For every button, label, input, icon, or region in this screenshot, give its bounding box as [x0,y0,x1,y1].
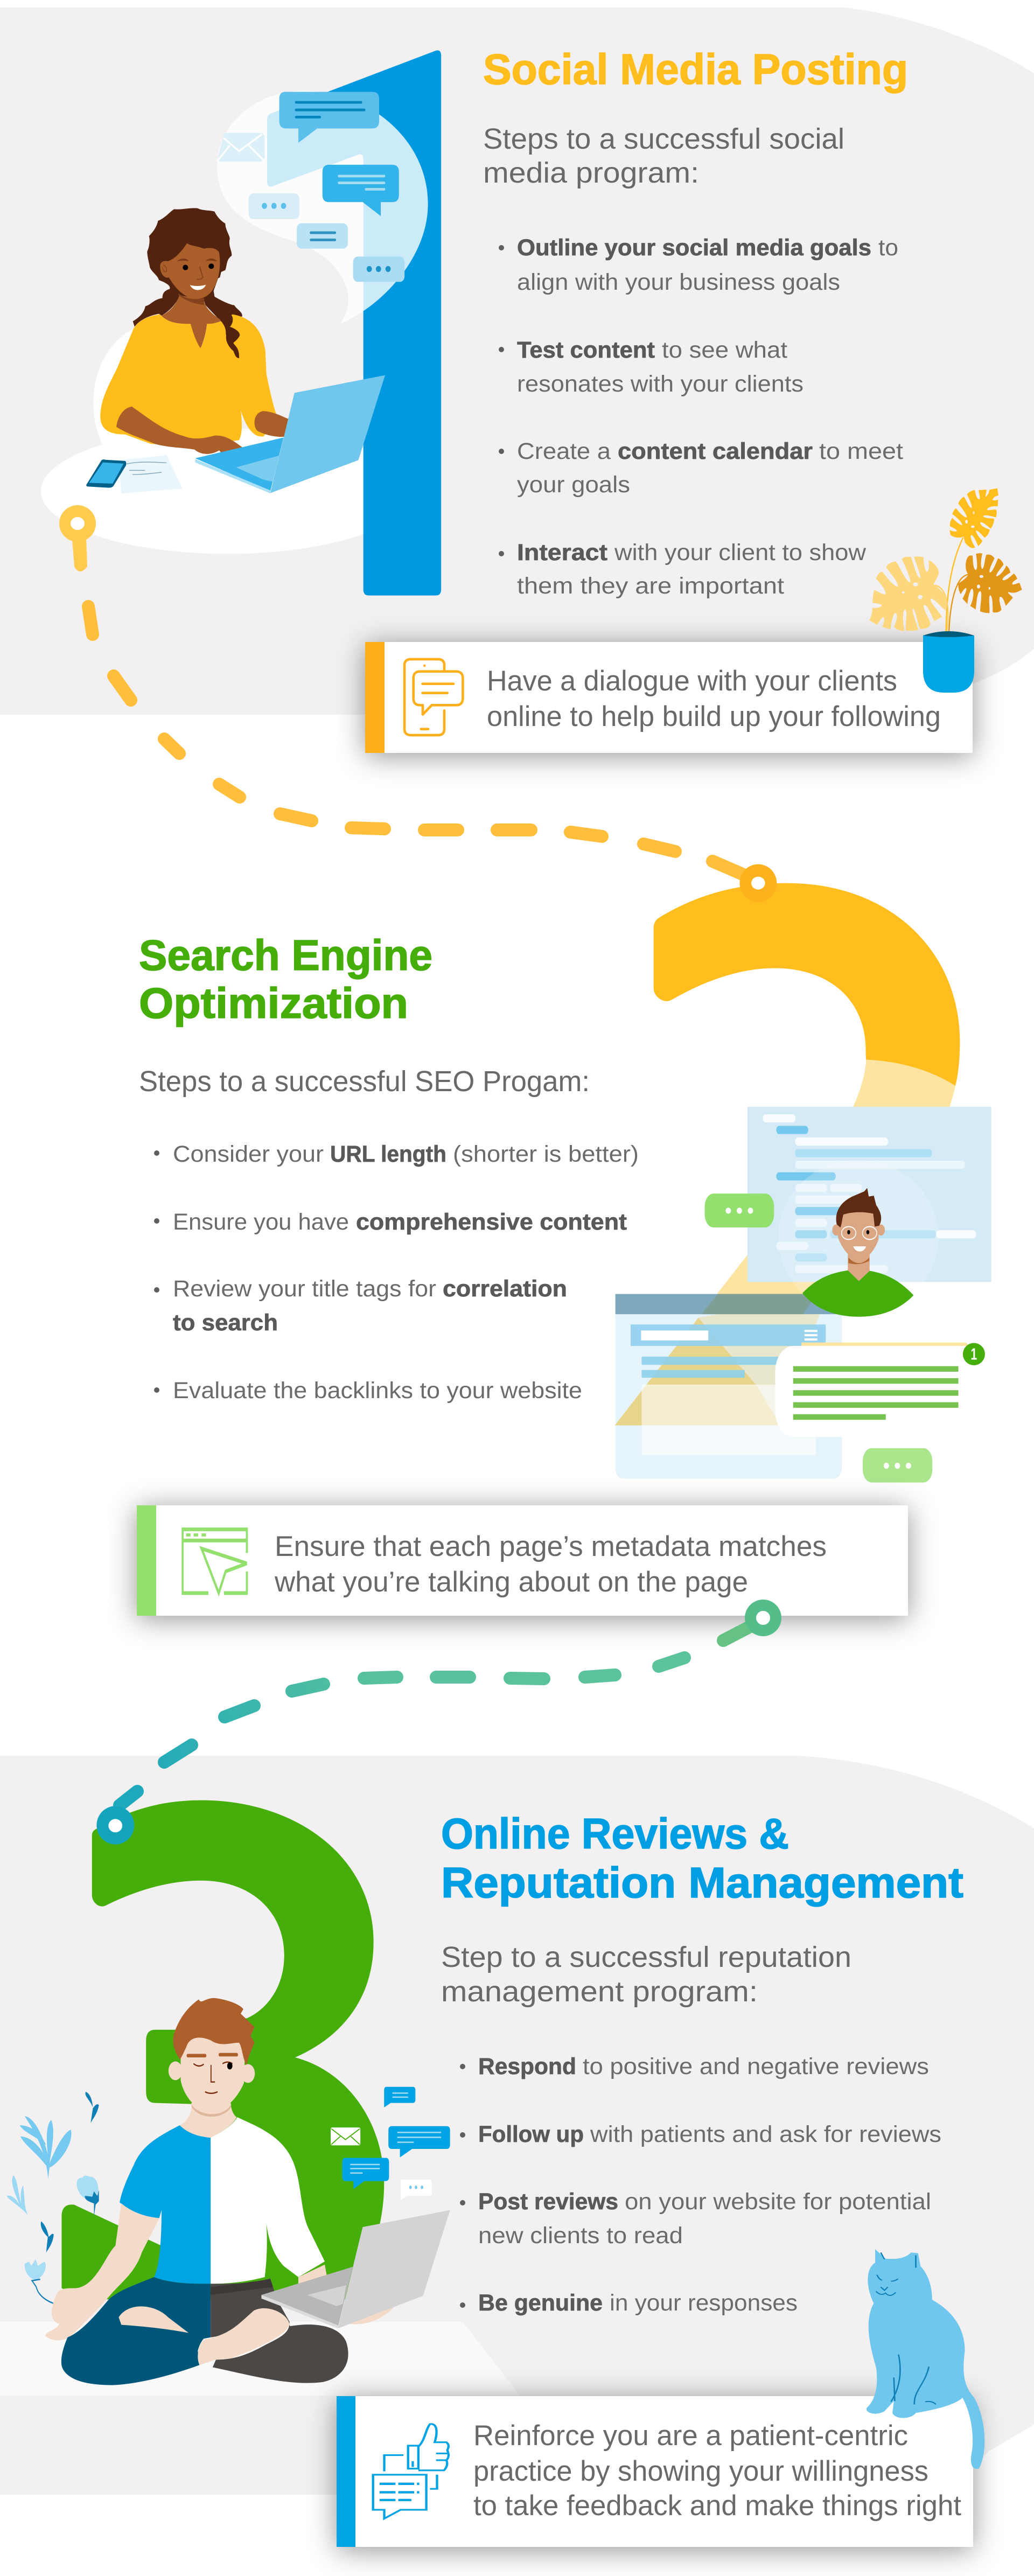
pin: step 2 [723,1600,781,1640]
bullet list: social: Create a [517,438,611,464]
pin overlap [739,864,777,902]
heading: search engine optimization: Search Engine [139,931,432,979]
icon: envelope [218,133,265,162]
table and backdrop [41,328,414,554]
typing bubble right [353,256,404,282]
pin start: step 1 [59,505,96,571]
bullet list: seo: comprehensive content [356,1209,627,1235]
icon: thumbs up and comment [373,2424,449,2518]
bullet list: social: to [878,235,898,261]
heading: social media posting: Social Media Posting [483,45,908,93]
chat bubble middle [323,165,399,216]
bullet list: social: to meet [819,438,903,464]
bullet list: reviews: new clients to read [478,2223,683,2249]
callout: reviews [337,2396,973,2547]
bullet list: social: Outline your social media goals [517,235,871,261]
bullet list: social: align with your business goals [517,269,840,295]
man meditating [45,1998,403,2385]
chat: green left [705,1193,774,1227]
floor [0,2322,520,2396]
bullet list: social: them they are important [517,573,784,599]
panel: online reviews and reputation management [0,1600,1034,2547]
message bubble [297,224,348,249]
bullet list: reviews [460,2054,941,2316]
woman braid over shirt [214,309,240,358]
bullet list: social: your goals [517,472,630,498]
heading: search engine optimization [139,931,432,1027]
woman body [100,315,290,461]
bullet list: reviews: in your responses [610,2290,798,2316]
heading: online reviews: Reputation Management [441,1859,963,1907]
bullet list: seo: URL length [330,1141,446,1167]
pin: step 3 [96,1806,134,1845]
callout: reviews: practice by showing your willingness [473,2455,928,2487]
notification card [775,1343,985,1437]
bullet list: reviews: Be genuine [478,2290,603,2316]
number 3 [61,1800,384,2299]
panel background: reviews [0,1756,1034,2495]
pin end: step 2 [740,864,777,902]
callout: social: online to help build up your following [487,701,941,732]
bullet list: reviews: with patients and ask for reviews [590,2121,941,2147]
typing bubble [249,193,299,219]
developer with glasses [802,1188,913,1317]
thought bubble [217,90,428,324]
callout: social: Have a dialogue with your clients [487,665,897,697]
bullet list: seo: Evaluate the backlinks to your website [173,1378,582,1404]
chat bubble top [280,92,379,143]
callout: seo: Ensure that each page’s metadata matches [275,1531,827,1562]
panel background: social [0,8,1034,715]
callout: social [365,642,973,753]
bullet list: social: Test content [517,337,655,363]
intro text: social [483,123,844,189]
intro text: reviews: management program: [441,1975,758,2008]
bullet list: seo [154,1141,639,1404]
bullet list: reviews: Post reviews [478,2189,618,2215]
woman head and hair [133,208,242,348]
illustration: woman at laptop with big number 1 [41,50,441,596]
icon: phone with chat [404,659,463,735]
phone and paper [86,455,183,493]
small blue plants [6,2092,99,2305]
illustration: number 3 with meditating man [6,1800,450,2385]
illustration: number 2 with developer and screens [615,864,991,1483]
callout: seo: what you’re talking about on the page [274,1566,748,1598]
dashed path: teal from step 2 to step 3 [120,1600,781,1805]
panel: social media posting [0,8,1034,753]
number 1 [267,50,441,596]
cat [867,2249,984,2469]
intro text: social: Steps to a successful social [483,123,844,155]
intro text: reviews: Step to a successful reputation [441,1941,851,1973]
intro text: social: media program: [483,157,699,189]
intro text: reviews [441,1941,851,2008]
bullet list: reviews: Follow up [478,2121,584,2147]
bullet list: seo: to search [173,1310,278,1336]
heading: online reviews [441,1810,963,1907]
bullet list: social: with your client to show [614,540,867,566]
bullet list: social: content calendar [618,438,813,464]
plant [869,488,1022,693]
bullet list: seo: Review your title tags for [173,1276,436,1302]
icon: floating messages [331,2087,450,2200]
pot [923,631,974,693]
bullet list: reviews: on your website for potential [625,2189,931,2215]
callout: reviews: Reinforce you are a patient-centric [473,2420,908,2452]
icon: browser cursor [183,1530,247,1593]
code panel [747,1107,991,1315]
number 2 [615,883,960,1426]
bullet list: seo: correlation [443,1276,567,1302]
bullet list: social: Interact [517,540,607,566]
laptop [195,375,385,493]
bullet list: social [499,235,903,599]
callout: seo [137,1505,908,1616]
bullet list: social: to see what [662,337,787,363]
bullet list: seo: Consider your [173,1141,324,1167]
bullet list: seo: (shorter is better) [453,1141,639,1167]
bullet list: reviews: Respond [478,2054,576,2079]
browser window [615,1294,842,1478]
notification card: 1 [971,1345,977,1364]
dashed path: yellow from step 1 to step 2 [59,505,777,902]
panel: search engine optimization [137,864,991,1616]
laptop grey [261,2210,450,2328]
chat: green bottom [863,1448,932,1483]
bullet list: seo: Ensure you have [173,1209,349,1235]
intro text: seo: Steps to a successful SEO Progam: [139,1065,590,1098]
callout: reviews: to take feedback and make things right [473,2490,961,2522]
heading: online reviews: Online Reviews & [441,1810,789,1858]
bullet list: social: resonates with your clients [517,371,804,397]
bullet list: reviews: to positive and negative reviews [583,2054,929,2079]
heading: search engine optimization: Optimization [139,979,408,1027]
